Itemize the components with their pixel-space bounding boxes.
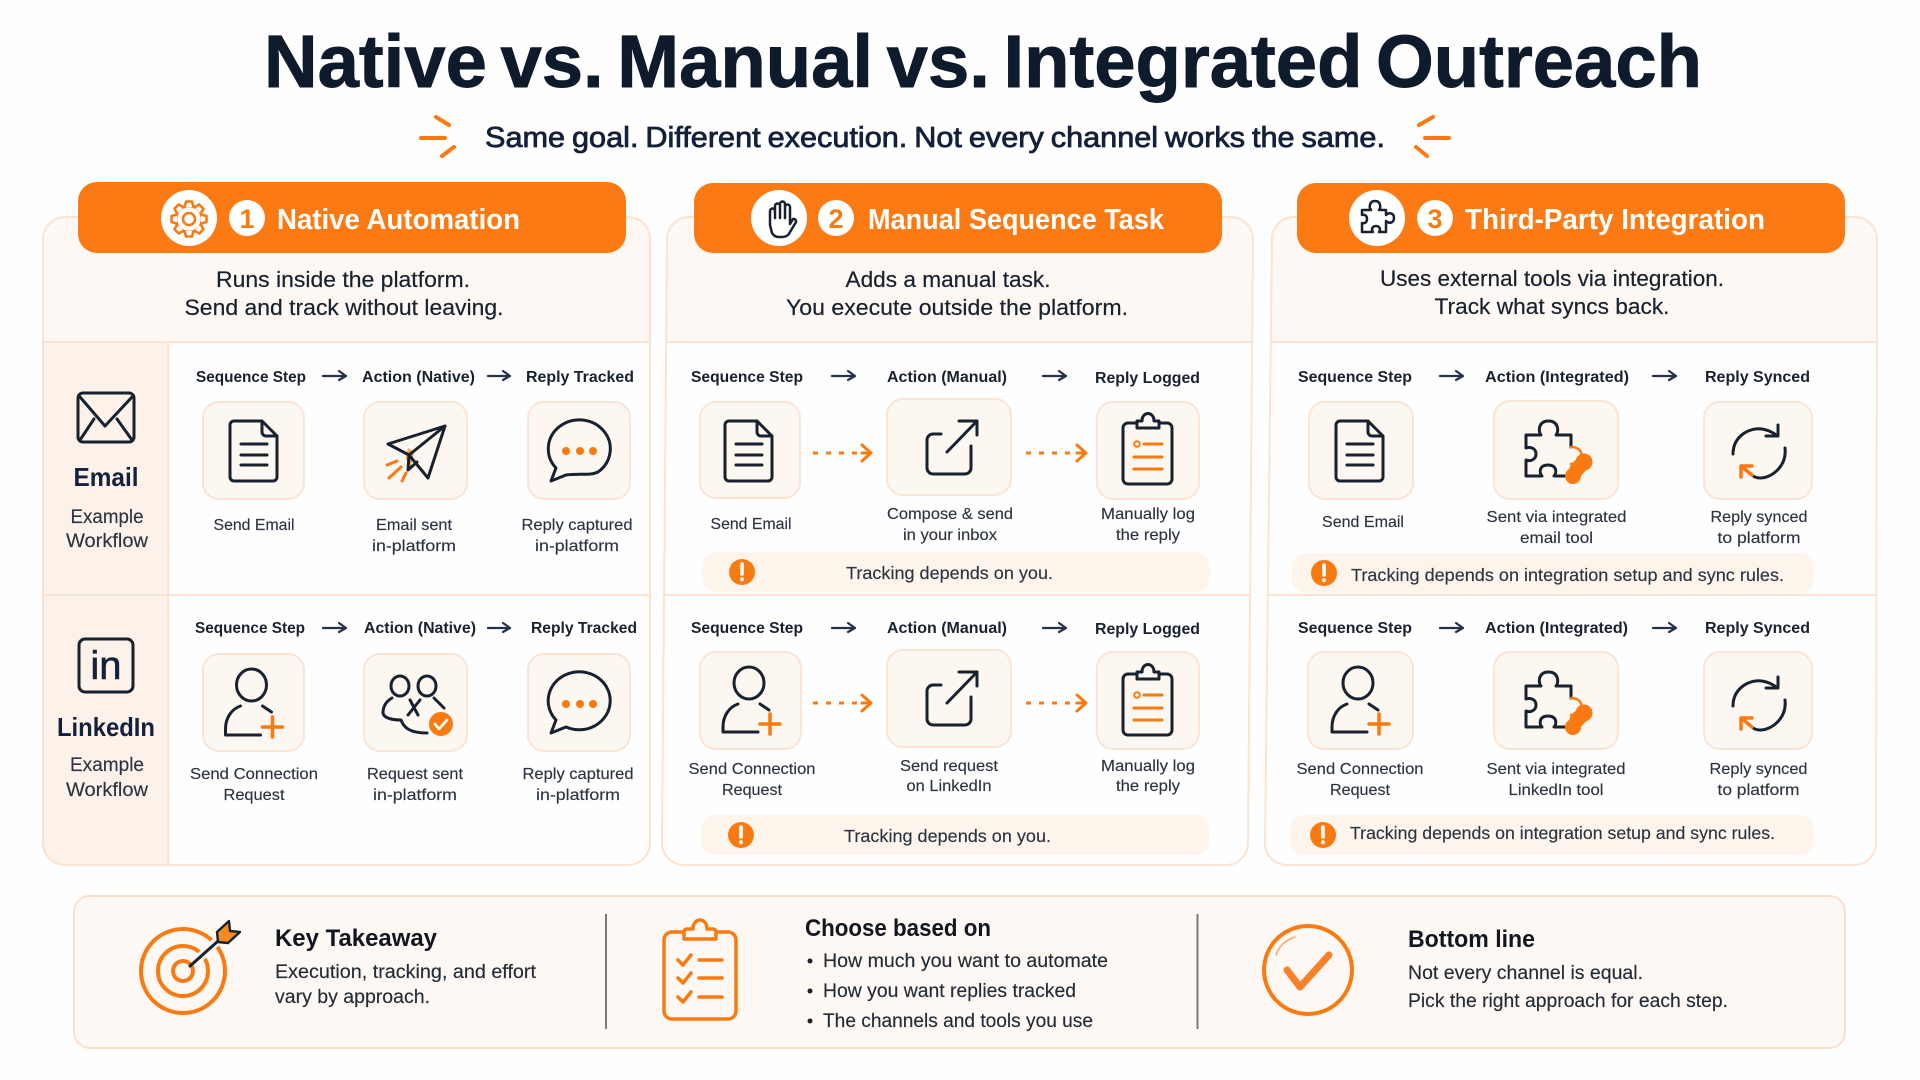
workflow: integrated email [1292,369,1814,593]
step: send connection request: Request [722,782,783,799]
step: send connection request [688,652,816,799]
column headings [1298,620,1810,637]
description: Uses external tools via integration. [1380,266,1724,291]
step: reply synced: Reply synced [1710,509,1808,526]
callout: tracking depends on integration: Tracking depends on integration setup and sync rules. [1350,823,1775,843]
example workflow label: Workflow [66,780,148,801]
panel: manual sequence task [662,183,1253,865]
body: Not every channel is equal. [1408,963,1643,984]
arrow: dashed to log [1026,445,1086,461]
footer background [74,896,1845,1048]
icon: right sparks [1416,117,1449,156]
callout: tracking depends on you: Tracking depends on you. [844,826,1051,846]
heading: Third-Party Integration [1465,204,1765,236]
callout: tracking depends on integration [1292,553,1814,593]
icon: check circle [1264,926,1352,1014]
title: Native vs. Manual vs. Integrated Outreach [264,20,1702,103]
arrow: dashed to log [1026,695,1086,711]
icon: hand [770,202,796,237]
column headings: Reply Tracked [531,620,637,637]
step: send email: Send Email [214,517,294,534]
step: send connection request: Send Connection [1296,761,1424,778]
step: manually log [1097,652,1199,795]
workflow: native linkedin [190,620,637,804]
body [275,962,537,1008]
step: send connection request: Request [1330,782,1391,799]
icon: puzzle piece [1362,201,1394,232]
panel frame [43,217,650,865]
heading: Bottom line [1408,926,1535,953]
workflow: integrated linkedin [1290,620,1814,855]
step: reply captured [522,654,634,804]
step: manually log: Manually log [1101,758,1195,775]
description: Track what syncs back. [1434,294,1670,319]
column headings [1298,369,1810,386]
step: request sent: Request sent [367,766,464,783]
panel: key takeaway footer [74,896,1845,1048]
column headings [195,620,637,637]
description: You execute outside the platform. [786,295,1128,320]
panel frame [1265,217,1877,865]
body: Pick the right approach for each step. [1408,991,1728,1012]
step: reply synced [1704,652,1812,799]
number badge 2 [818,200,854,236]
column headings: Sequence Step [1298,620,1412,637]
step: email sent: Email sent [376,517,453,534]
header pill: manual sequence task [694,183,1222,253]
column headings: Sequence Step [196,369,306,386]
step: reply synced [1704,402,1812,547]
step: send connection request [190,654,318,804]
key takeaway block [141,921,537,1013]
step: reply captured: Reply captured [522,766,634,783]
heading: Choose based on [805,915,991,942]
column headings: Action (Native) [364,620,476,637]
step: send email [1309,402,1413,531]
channel label: linkedin [57,639,155,801]
body [1408,963,1728,1012]
email label: Email [74,462,138,492]
step: compose and send: in your inbox [903,527,997,544]
step: manually log [1097,402,1199,544]
body: Execution, tracking, and effort [275,962,537,983]
column headings: Sequence Step [1298,369,1412,386]
step: send request: Send request [900,758,999,775]
channel label: email [66,393,148,552]
description: Adds a manual task. [846,267,1050,292]
step: send request [887,650,1011,795]
workflow: manual email [691,369,1210,592]
bullet list [808,951,1108,1032]
number badge 2: 2 [828,204,844,234]
description [786,267,1128,320]
step: manually log: the reply [1116,778,1180,795]
choose based on block [664,915,1108,1032]
description: Runs inside the platform. [216,267,470,292]
icon: linkedin [79,639,133,692]
callout: tracking depends on you [702,552,1210,592]
step: send email [700,402,800,533]
panel: third-party integration [1265,183,1877,865]
arrow: dashed to action [813,445,871,461]
example workflow label: Workflow [66,531,148,552]
callout: tracking depends on you: Tracking depends on you. [846,563,1053,583]
panel: native automation [43,182,650,865]
step: email sent: in-platform [372,538,456,555]
step: send email: Send Email [1322,514,1404,531]
bullet list: The channels and tools you use [823,1011,1093,1032]
example workflow label [66,507,148,552]
example workflow label: Example [70,507,144,528]
step: reply captured [522,402,632,555]
linkedin label: LinkedIn [57,712,155,742]
column headings [691,620,1200,638]
step: send email [203,402,304,534]
number badge 3: 3 [1427,204,1443,234]
bullet list: How much you want to automate [823,951,1108,972]
column headings [196,369,634,386]
bullet list: How you want replies tracked [823,981,1076,1002]
heading: Key Takeaway [275,925,438,952]
subtitle text: Same goal. Different execution. Not every channel works the same. [485,122,1385,154]
step: request sent: in-platform [373,787,457,804]
step: sent via integrated tool: Sent via integrated [1486,509,1626,526]
number badge 1: 1 [239,204,255,234]
number badge 1 [229,200,265,236]
step: sent via integrated tool [1486,652,1626,799]
subtitle with accent sparks [421,117,1449,156]
step: sent via integrated tool [1486,401,1626,547]
bottom line block [1264,926,1728,1014]
heading: Manual Sequence Task [868,204,1165,236]
column headings: Reply Logged [1095,621,1200,638]
step: send connection request: Send Connection [688,761,816,778]
callout: tracking depends on integration: Tracking depends on integration setup and sync rules. [1351,565,1784,585]
arrow: dashed to action [813,695,871,711]
workflow: manual linkedin [688,620,1209,855]
heading: Native Automation [277,204,520,236]
column headings: Sequence Step [691,369,803,386]
number badge 3 [1417,200,1453,236]
description: Send and track without leaving. [184,295,504,320]
step: send connection request: Send Connection [190,766,318,783]
column headings: Action (Manual) [887,620,1007,637]
body: vary by approach. [275,987,430,1008]
step: send email: Send Email [710,516,792,533]
icon: linkedin: in [90,644,122,688]
step: send request: on LinkedIn [906,778,992,795]
header pill: native automation [78,182,626,253]
step: reply synced: to platform [1718,530,1800,547]
column headings: Sequence Step [691,620,803,637]
step: compose and send: Compose & send [887,506,1013,523]
step: reply synced: Reply synced [1710,761,1808,778]
column headings: Sequence Step [195,620,305,637]
column headings: Action (Integrated) [1485,620,1628,637]
column headings: Action (Manual) [887,369,1007,386]
column headings: Reply Logged [1095,370,1200,387]
icon: gear [172,202,206,236]
step: reply captured: in-platform [536,787,620,804]
callout: tracking depends on integration [1290,815,1814,855]
step: manually log: the reply [1116,527,1180,544]
step: reply synced: to platform [1718,782,1800,799]
column headings: Reply Synced [1705,620,1810,637]
step: reply captured: in-platform [535,538,619,555]
column headings: Reply Tracked [526,369,634,386]
icon: envelope [78,393,134,442]
workflow: native email [196,369,634,555]
step: compose and send [887,399,1013,544]
icon: checklist clipboard [664,920,736,1019]
step: sent via integrated tool: email tool [1520,530,1593,547]
column headings: Reply Synced [1705,369,1810,386]
step: send connection request [1296,652,1424,799]
example workflow label: Example [70,755,144,776]
description [184,267,504,320]
callout: tracking depends on you [701,815,1209,855]
icon: left sparks [421,117,454,156]
step: manually log: Manually log [1101,506,1195,523]
description [1380,266,1724,319]
step: sent via integrated tool: LinkedIn tool [1508,782,1604,799]
step: sent via integrated tool: Sent via integrated [1486,761,1626,778]
icon: target with dart [141,921,240,1013]
step: reply captured: Reply captured [522,517,632,534]
example workflow label [66,755,148,801]
column headings: Action (Integrated) [1485,369,1629,386]
column headings: Action (Native) [362,369,475,386]
step: email sent [364,402,467,555]
column headings [691,369,1200,387]
step: request sent [364,654,467,804]
header pill: third-party integration [1297,183,1845,253]
panel frame [662,217,1253,865]
step: send connection request: Request [224,787,285,804]
